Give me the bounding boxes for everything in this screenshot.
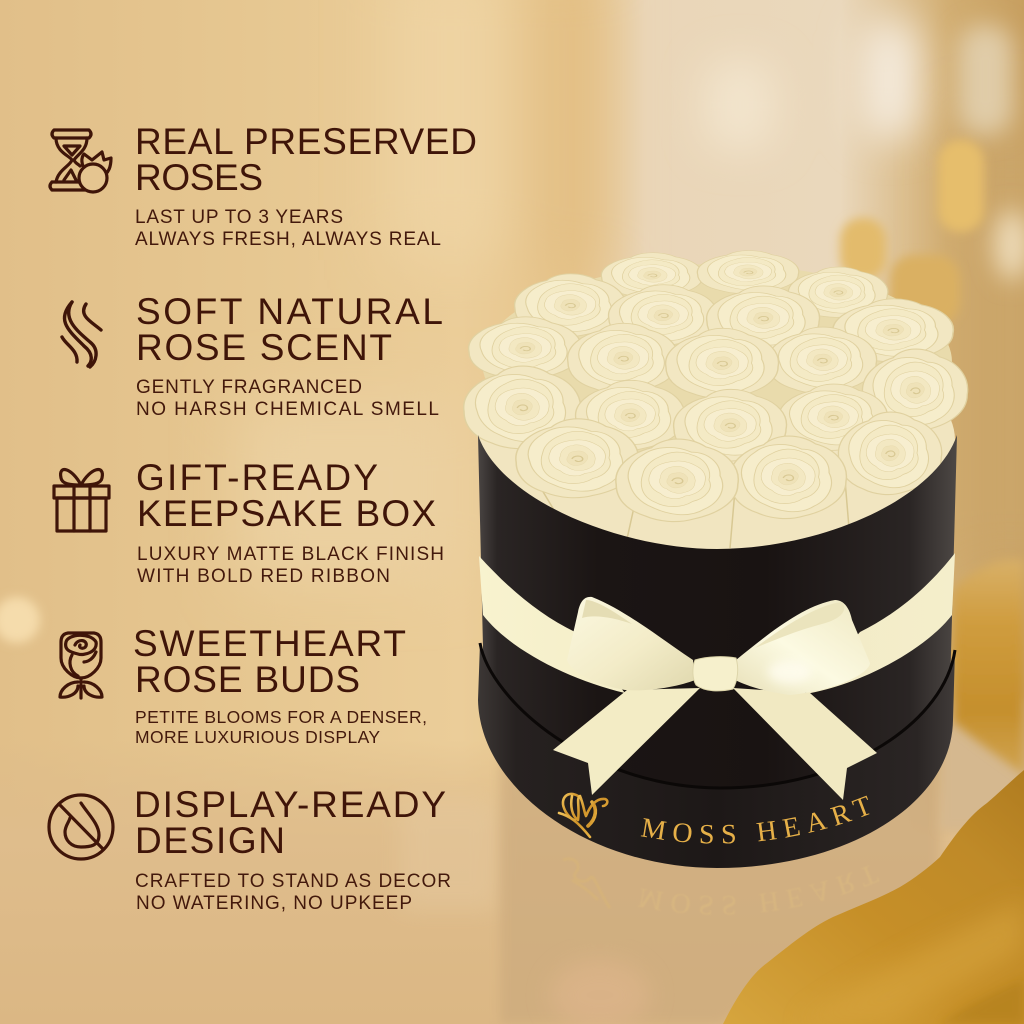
heading (134, 784, 446, 861)
box interior with rose stems (479, 331, 955, 549)
heading: SOFT NATURAL (136, 291, 443, 332)
rose bouquet (458, 247, 972, 548)
product: box of cream roses (463, 250, 968, 868)
description: LAST UP TO 3 YEARS (135, 207, 343, 228)
heading: SWEETHEART (133, 623, 406, 664)
heading (133, 623, 406, 700)
heading: ROSE SCENT (136, 327, 392, 368)
heading: GIFT-READY (136, 457, 378, 498)
reflection of box branding: MOSS HEART (636, 857, 882, 920)
icon: hourglass with rose (50, 130, 111, 192)
description: CRAFTED TO STAND AS DECOR (135, 871, 451, 892)
heading: DISPLAY-READY (134, 784, 446, 825)
feature 1: real preserved roses (50, 121, 477, 250)
feature 2: soft natural rose scent (62, 291, 443, 420)
gold silk fabric (723, 559, 1024, 1024)
heading (136, 291, 443, 368)
heading: ROSES (135, 157, 263, 198)
brand logo (559, 794, 607, 837)
brand name: MOSS HEART (640, 796, 870, 844)
heading: DESIGN (135, 820, 285, 861)
heading: REAL PRESERVED (135, 121, 477, 162)
feature 5: display-ready design (49, 784, 451, 914)
box lid (478, 643, 955, 868)
description: NO WATERING, NO UPKEEP (136, 893, 412, 914)
box body (478, 435, 957, 800)
icon: rose (60, 633, 102, 698)
heading (136, 457, 436, 534)
description (135, 871, 451, 914)
description (135, 707, 427, 747)
heading: KEEPSAKE BOX (137, 493, 436, 534)
description: GENTLY FRAGRANCED (136, 377, 362, 398)
heading: ROSE BUDS (135, 659, 360, 700)
ribbon band (479, 553, 955, 694)
description: WITH BOLD RED RIBBON (137, 566, 390, 587)
floor reflection of the box (400, 700, 1024, 1024)
heading (135, 121, 477, 198)
description: MORE LUXURIOUS DISPLAY (135, 727, 380, 747)
icon: gift box (54, 470, 109, 531)
feature 3: gift-ready keepsake box (54, 457, 444, 587)
feature 4: sweetheart rose buds (60, 623, 427, 747)
description: PETITE BLOOMS FOR A DENSER, (135, 707, 427, 727)
description (136, 377, 439, 420)
ribbon tails (553, 688, 877, 800)
description: NO HARSH CHEMICAL SMELL (136, 399, 439, 420)
description (137, 544, 444, 587)
icon: no water drop (49, 795, 113, 859)
icon: scent waves (62, 302, 101, 367)
bow knot (693, 657, 738, 691)
description: ALWAYS FRESH, ALWAYS REAL (135, 229, 441, 250)
description (135, 207, 441, 250)
bow loops (567, 597, 870, 695)
description: LUXURY MATTE BLACK FINISH (137, 544, 444, 565)
